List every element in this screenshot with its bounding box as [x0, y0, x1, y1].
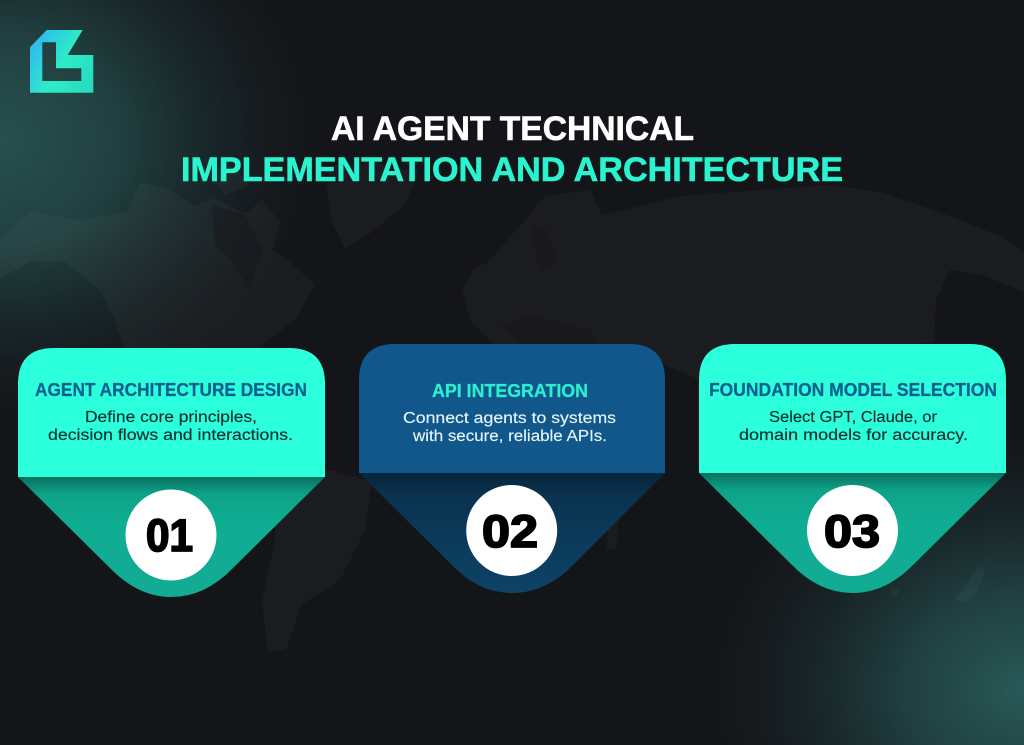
card description: decision flows and interactions.	[48, 427, 293, 444]
card heading: API INTEGRATION	[432, 380, 588, 401]
card fold	[699, 473, 1006, 593]
card description: domain models for accuracy.	[739, 427, 968, 444]
number badge 01: 01	[146, 510, 193, 561]
card fold	[359, 473, 665, 593]
icon: logo	[30, 30, 93, 93]
number badge 01	[126, 490, 216, 580]
title line 1: AI AGENT TECHNICAL	[331, 110, 694, 148]
number badge 02: 02	[482, 506, 538, 557]
card description: Connect agents to systems	[403, 410, 616, 427]
card fold	[18, 477, 325, 597]
panel: agent architecture design	[18, 348, 325, 597]
card description	[739, 409, 968, 444]
card description	[48, 409, 293, 444]
card top	[359, 344, 665, 473]
title line 2: IMPLEMENTATION AND ARCHITECTURE	[181, 151, 843, 189]
card description: Select GPT, Claude, or	[769, 409, 937, 426]
card description: with secure, reliable APIs.	[412, 428, 607, 445]
world map backdrop	[0, 163, 1024, 652]
panel: api integration	[359, 344, 665, 593]
card description	[403, 410, 616, 445]
number badge 02	[466, 485, 557, 576]
card top	[699, 344, 1006, 473]
map: inland seas	[212, 205, 600, 345]
number badge 03: 03	[824, 506, 880, 557]
number badge 03	[807, 485, 898, 576]
card heading: FOUNDATION MODEL SELECTION	[709, 379, 997, 400]
card top	[18, 348, 325, 477]
card heading: AGENT ARCHITECTURE DESIGN	[35, 379, 307, 400]
panel: foundation model selection	[699, 344, 1006, 593]
card description: Define core principles,	[85, 409, 257, 426]
title	[181, 110, 843, 189]
